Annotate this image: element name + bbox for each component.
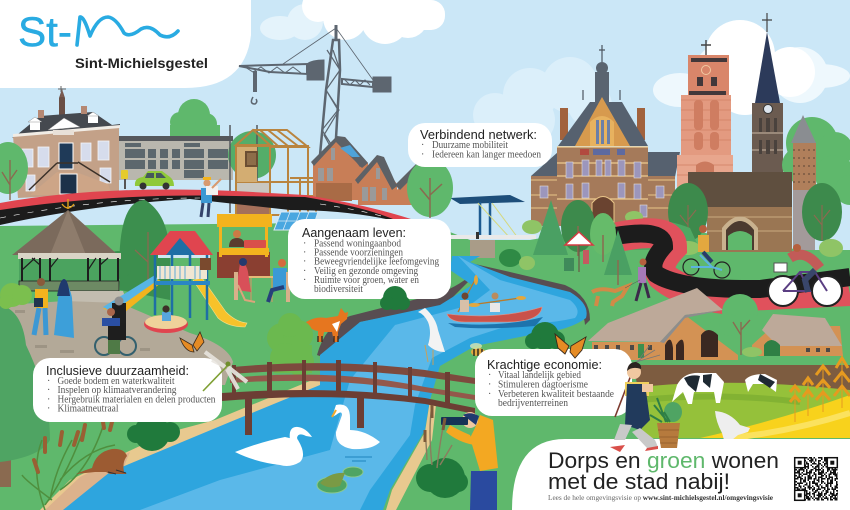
panel: verbindend netwerk (408, 123, 552, 167)
spire tower (752, 13, 783, 173)
panel list (303, 238, 439, 295)
panel list: Duurzame mobiliteit (432, 140, 508, 151)
river (63, 256, 587, 510)
panel list: Vitaal landelijk gebied (498, 370, 581, 381)
panel list: · (47, 376, 50, 387)
panel heading: Aangenaam leven: (302, 226, 406, 240)
wheelchair user (95, 296, 136, 355)
crane (239, 25, 391, 155)
drawbridge (450, 195, 536, 258)
kayak with rowers (447, 275, 543, 328)
green car (135, 171, 174, 190)
monarch butterfly (180, 332, 204, 352)
clouds (260, 0, 850, 145)
second barn (752, 314, 843, 356)
panel list (488, 370, 615, 409)
panel: inclusieve duurzaamheid (33, 358, 222, 422)
panel list: Passende voorzieningen (314, 248, 403, 258)
slogan second line: met de stad nabij! (548, 469, 730, 494)
panel heading: Krachtige economie: (487, 358, 602, 372)
panel list: · (47, 385, 50, 396)
ground behind right side (0, 220, 850, 510)
tree behind apartments (170, 99, 220, 137)
sky background (0, 0, 850, 300)
panel list: bedrijventerreinen (498, 398, 568, 409)
panel list: Hergebruik materialen en delen producten (58, 394, 216, 406)
panel background (408, 123, 552, 167)
panel list (421, 140, 541, 160)
panel list: · (303, 248, 306, 258)
construction frame (230, 125, 316, 215)
cows (672, 373, 777, 404)
panel list: · (303, 275, 306, 286)
photographer (441, 412, 498, 510)
dark bush on panel edge (380, 286, 410, 310)
swans (235, 405, 380, 466)
farm field (632, 365, 850, 438)
kiosk (200, 214, 272, 278)
shrubs by the footbridge (267, 313, 314, 376)
call-out background (512, 439, 850, 510)
people on the plaza (34, 278, 74, 338)
main slogan: Dorps en groen wonen (548, 448, 779, 473)
logo background blob (0, 0, 251, 88)
panel list: · (303, 266, 306, 277)
playground (103, 231, 247, 327)
panel list: Klimaatneutraal (58, 404, 119, 414)
panel list: Inspelen op klimaatverandering (58, 385, 176, 396)
woman cycling (768, 244, 842, 306)
red brick tower (677, 40, 733, 192)
walking woman and dog (592, 258, 649, 306)
panel list: Iedereen kan langer meedoen (432, 150, 541, 160)
panel list: · (303, 256, 306, 268)
main barn (588, 288, 738, 360)
pavilion trees (19, 200, 170, 300)
plaza (5, 301, 233, 385)
farmer (610, 345, 660, 452)
church hall building (531, 45, 680, 226)
big tree behind round tower (782, 117, 850, 205)
panel list: Veilig en gezonde omgeving (314, 266, 418, 277)
panel list: · (421, 140, 424, 151)
round tower (791, 115, 816, 252)
dragonfly on panel (203, 352, 247, 391)
engineer (201, 177, 221, 217)
big left tree (0, 305, 50, 487)
gate building (688, 172, 792, 252)
website line: Lees de hele omgevingsvisie op www.sint-michielsgestel.nl/omgevingsvisie (548, 493, 774, 502)
panel list: Verbeteren kwaliteit bestaande (498, 389, 615, 400)
panel list: · (47, 394, 50, 406)
logo name: Sint-Michielsgestel (75, 55, 208, 71)
panel: aangenaam leven (288, 219, 451, 299)
trees near bridge (499, 200, 632, 285)
sandbox (144, 305, 188, 333)
bee (470, 343, 485, 356)
reeds by photographer (425, 405, 452, 468)
wheat (790, 358, 850, 422)
vegetable basket (650, 398, 682, 448)
town hall (12, 86, 120, 198)
panel list: · (47, 404, 50, 414)
panel list: Goede bodem en waterkwaliteit (58, 376, 175, 387)
panel list: · (488, 389, 491, 400)
panel heading: Verbindend netwerk: (420, 128, 537, 142)
farm tree (719, 294, 763, 357)
tree next to bridge (407, 159, 453, 218)
trees near gate (668, 183, 842, 241)
butterfly on panel (555, 334, 586, 358)
QR code (794, 458, 838, 500)
hill and shrubs (522, 211, 843, 257)
heron (418, 308, 445, 365)
panel list: biodiversiteit (314, 284, 363, 295)
land right of river bank (386, 400, 436, 510)
panel: krachtige economie (475, 349, 632, 416)
panel background (475, 349, 632, 416)
dragonfly wings (205, 352, 247, 389)
right road (616, 233, 850, 302)
cafe table with couple (234, 258, 290, 302)
lily pads and frog (317, 467, 363, 493)
bottom call-out panel (512, 439, 850, 510)
left road (0, 190, 420, 226)
panel list: · (488, 380, 491, 390)
panel list: · (421, 150, 424, 160)
panel list: Passend woningaanbod (314, 238, 401, 250)
cyclist (683, 225, 730, 278)
green bush behind construction (228, 131, 276, 179)
panel list (47, 376, 216, 414)
plaza paving marks (15, 310, 195, 353)
plaza bush (0, 283, 32, 309)
solar panel (274, 212, 318, 230)
logo (18, 8, 178, 55)
beaver (76, 449, 127, 474)
rock banks (317, 262, 590, 358)
muddy bank (45, 452, 130, 510)
fox (306, 308, 348, 342)
footbridge (222, 360, 475, 435)
brick houses (311, 136, 430, 205)
left tree (0, 142, 28, 200)
parking meter (121, 170, 128, 189)
logo: St- (18, 8, 72, 55)
apartment building (118, 136, 233, 180)
farm land (660, 306, 850, 360)
panel list: Ruimte voor groen, water en (314, 275, 419, 286)
chicken (715, 411, 750, 440)
pavilion (12, 199, 128, 305)
umbrella and cafe visitors (564, 232, 593, 272)
panel list: Stimuleren dagtoerisme (498, 380, 589, 390)
beach (40, 376, 325, 510)
panel list: · (303, 238, 306, 250)
panel list: · (488, 370, 491, 381)
panel heading: Inclusieve duurzaamheid: (46, 364, 189, 378)
panel background (288, 219, 451, 299)
panel background (33, 358, 222, 422)
dark bushes (127, 322, 565, 498)
panel list: Beweegvriendelijke leefomgeving (314, 256, 439, 268)
reeds (22, 416, 115, 510)
